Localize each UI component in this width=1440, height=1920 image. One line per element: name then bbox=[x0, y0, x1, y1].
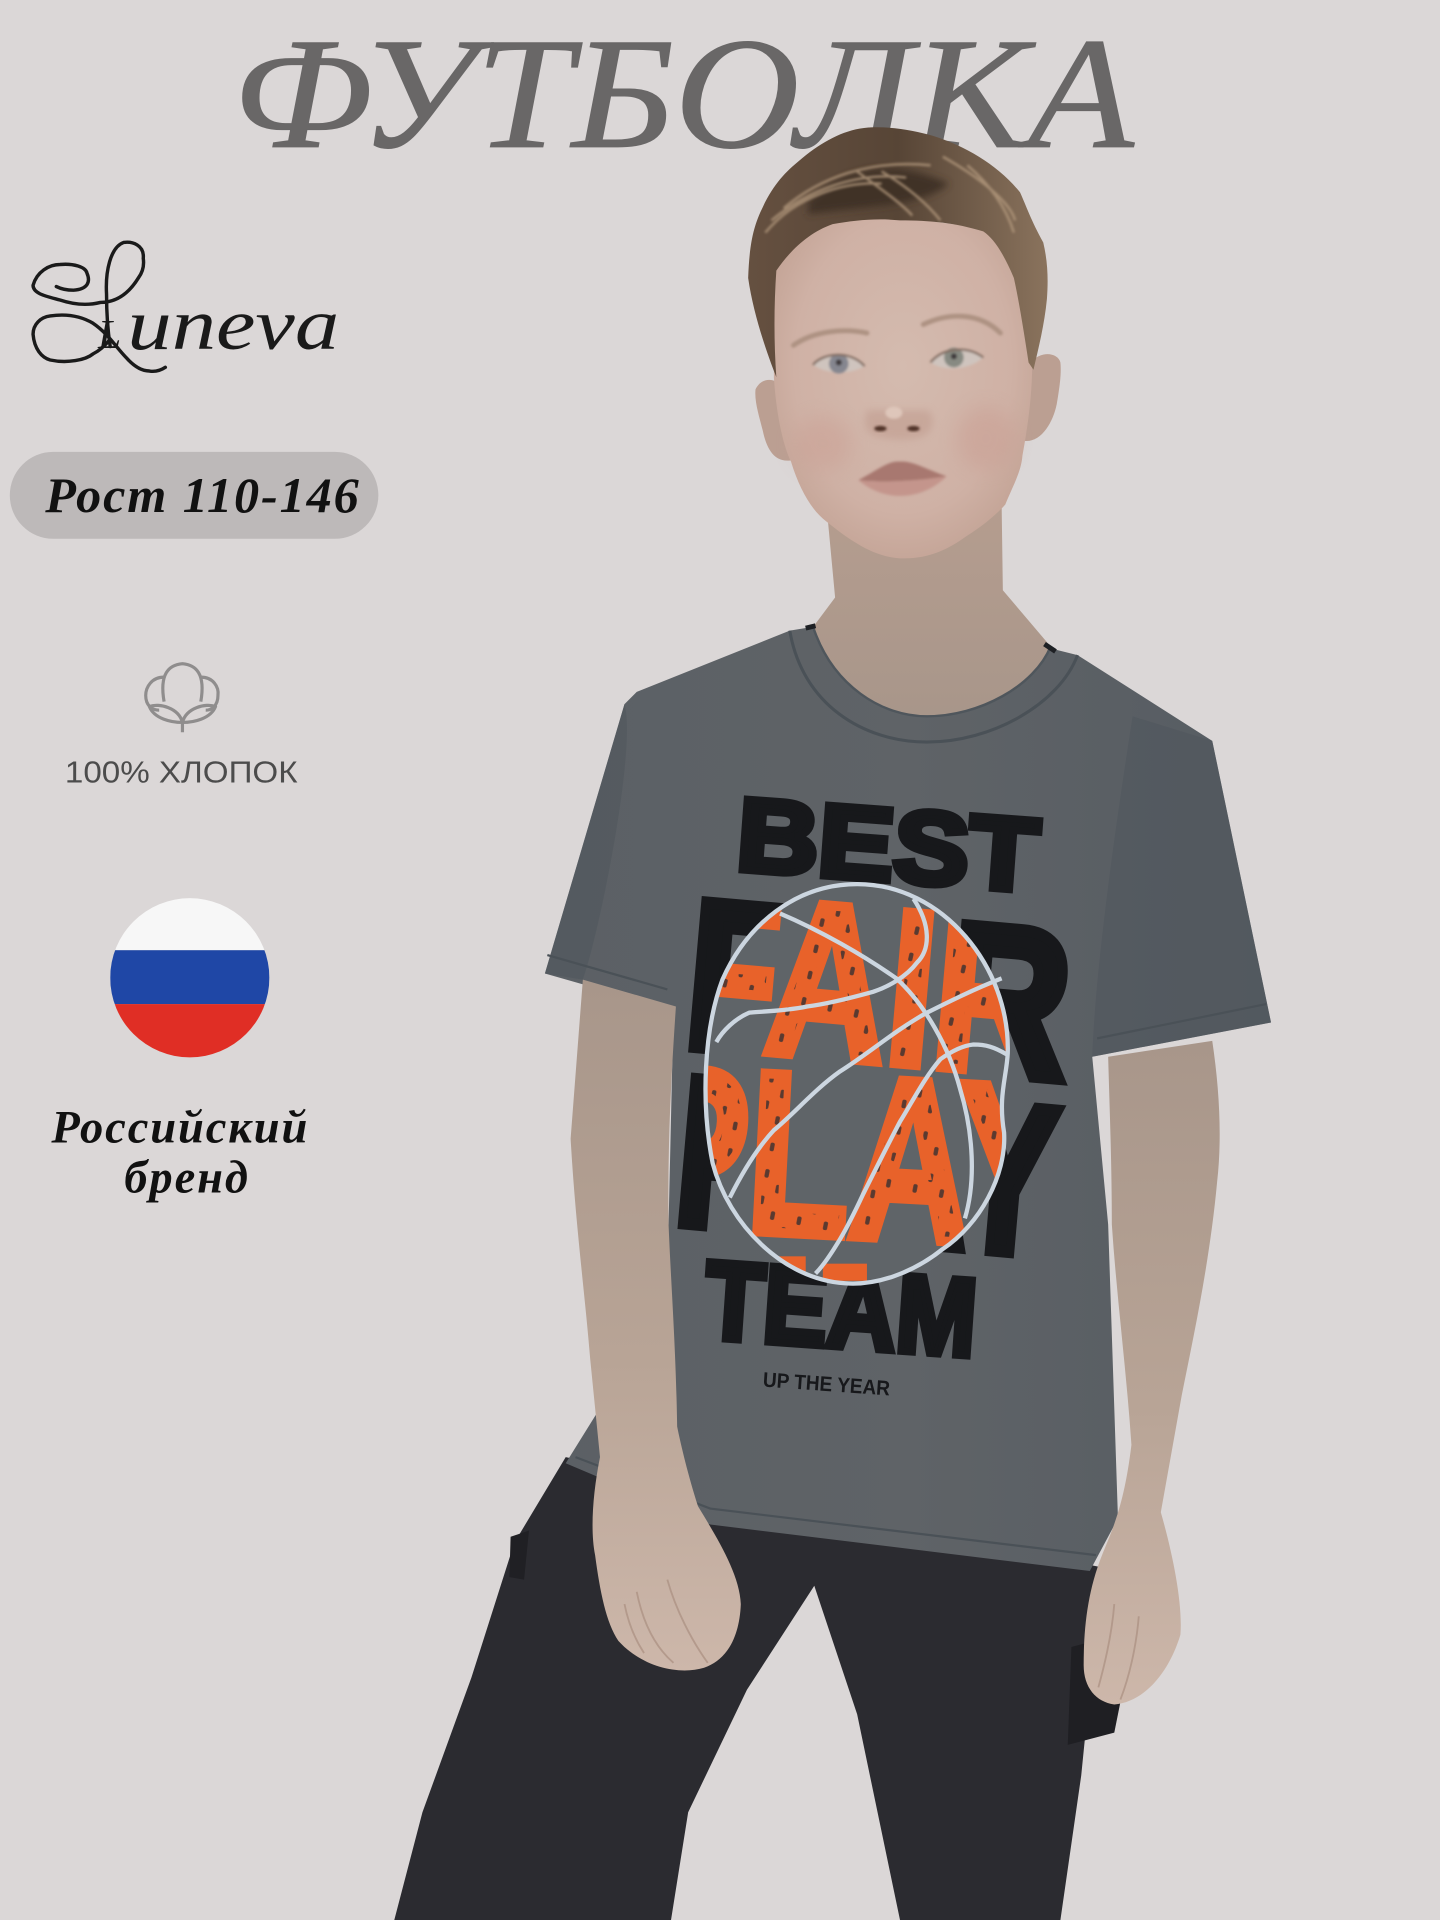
mouth bbox=[858, 462, 947, 496]
print text: team: TEAM bbox=[701, 1239, 981, 1380]
print text: play: PLAY bbox=[669, 1032, 1065, 1300]
russian brand caption: бренд bbox=[124, 1153, 248, 1204]
brand logo: uneva bbox=[127, 284, 339, 365]
title: ФУТБОЛКА bbox=[233, 6, 1135, 182]
head bbox=[748, 127, 1061, 558]
ears bbox=[755, 380, 791, 461]
nose bbox=[865, 410, 933, 440]
brand logo bbox=[33, 242, 339, 371]
face bbox=[774, 208, 1032, 558]
eyes bbox=[813, 348, 983, 373]
height badge bbox=[10, 452, 378, 539]
left arm bbox=[571, 980, 741, 1670]
icon: russian flag bbox=[110, 898, 269, 1058]
pants bbox=[394, 1457, 1133, 1920]
russian brand caption: Российский bbox=[50, 1102, 307, 1153]
icon: cotton boll bbox=[146, 664, 218, 732]
brand logo: L bbox=[97, 312, 121, 358]
t-shirt bbox=[545, 627, 1271, 1571]
basketball: FAIR bbox=[666, 844, 1066, 1124]
right arm bbox=[1084, 1041, 1220, 1704]
russian brand caption bbox=[50, 1102, 307, 1204]
basketball: PLAY bbox=[631, 1017, 1075, 1297]
eyebrows bbox=[793, 316, 1000, 345]
shirt print bbox=[678, 795, 1068, 1396]
basketball bbox=[703, 882, 1010, 1286]
print text: best: BEST bbox=[733, 777, 1042, 913]
print text: fair: FAIR bbox=[678, 856, 1080, 1124]
hair bbox=[748, 127, 1048, 377]
model photo: boy bbox=[394, 127, 1271, 1920]
cotton label: 100% ХЛОПОК bbox=[65, 755, 298, 789]
print text: up the year: UP THE YEAR bbox=[762, 1369, 891, 1400]
neck bbox=[790, 504, 1078, 742]
height badge: Рост 110-146 bbox=[44, 467, 360, 523]
